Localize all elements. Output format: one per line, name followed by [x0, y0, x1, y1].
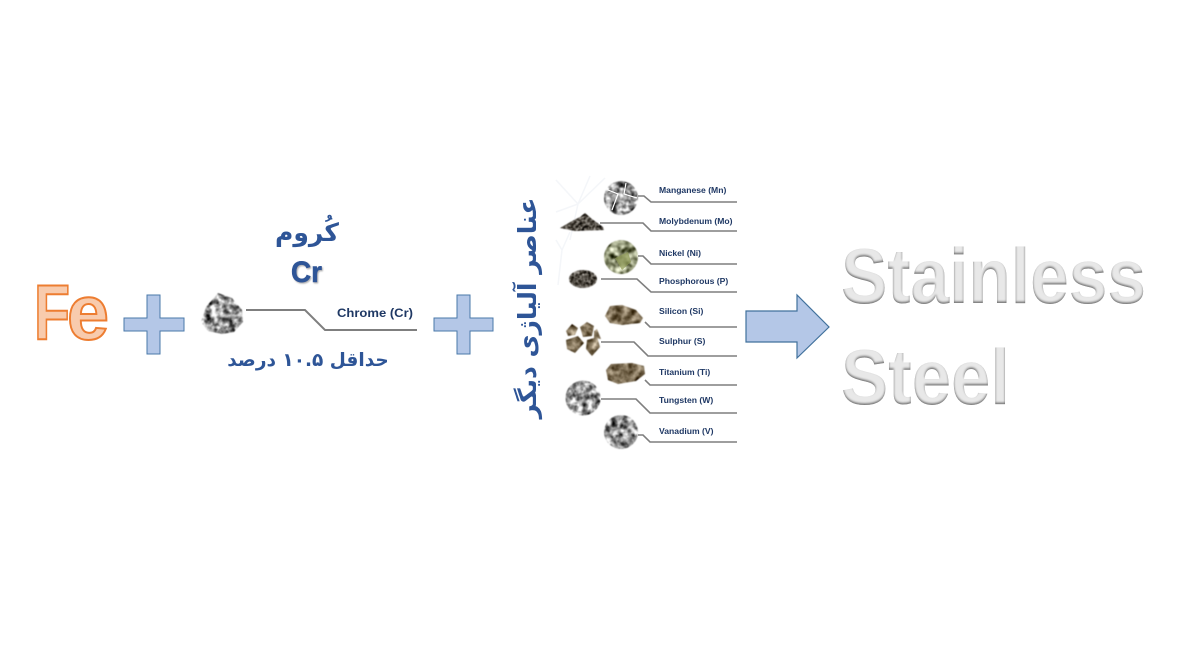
- panel: alloying elements: [556, 176, 737, 449]
- symbol Cr: Cr: [291, 256, 322, 289]
- chrome label: Chrome (Cr): [337, 306, 413, 320]
- sulphur item: [566, 322, 737, 356]
- iron symbol Fe: [34, 268, 109, 356]
- chromium group: [201, 215, 417, 371]
- chrome leader line: [246, 310, 417, 330]
- arrow: [746, 295, 829, 358]
- nickel item: Nickel (Ni): [659, 248, 701, 258]
- result title: Stainless Steel: Stainless: [841, 232, 1146, 320]
- iron symbol Fe: e: [67, 268, 109, 356]
- manganese item: [604, 181, 737, 215]
- molybdenum item: [560, 213, 737, 231]
- persian note: minimum 10.5 percent: حداقل ۱۰.۵ درصد: [227, 350, 389, 371]
- titanium item: Titanium (Ti): [659, 367, 710, 377]
- plus sign 1: [124, 295, 184, 354]
- phosphorous item: [569, 270, 737, 292]
- silicon item: Silicon (Si): [659, 306, 704, 316]
- icon: chrome rock: [201, 293, 243, 334]
- persian vertical heading: other alloying elements: عناصر آلیاژی دیگر: [512, 198, 543, 420]
- vanadium item: Vanadium (V): [659, 426, 714, 436]
- silicon item: [605, 305, 737, 327]
- iron symbol Fe: F: [34, 268, 70, 356]
- result title: Stainless Steel: Steel: [841, 333, 1010, 421]
- nickel item: [604, 240, 737, 274]
- plus sign 2: [434, 295, 493, 354]
- vanadium item: [604, 415, 737, 449]
- titanium item: [606, 363, 737, 385]
- sulphur item: Sulphur (S): [659, 336, 705, 346]
- result title: Stainless Steel: [841, 232, 1146, 421]
- tungsten item: Tungsten (W): [659, 395, 713, 405]
- molybdenum item: Molybdenum (Mo): [659, 216, 733, 226]
- manganese item: Manganese (Mn): [659, 185, 726, 195]
- phosphorous item: Phosphorous (P): [659, 276, 728, 286]
- persian label: chrome: کُروم: [275, 215, 339, 248]
- tungsten item: [566, 380, 737, 416]
